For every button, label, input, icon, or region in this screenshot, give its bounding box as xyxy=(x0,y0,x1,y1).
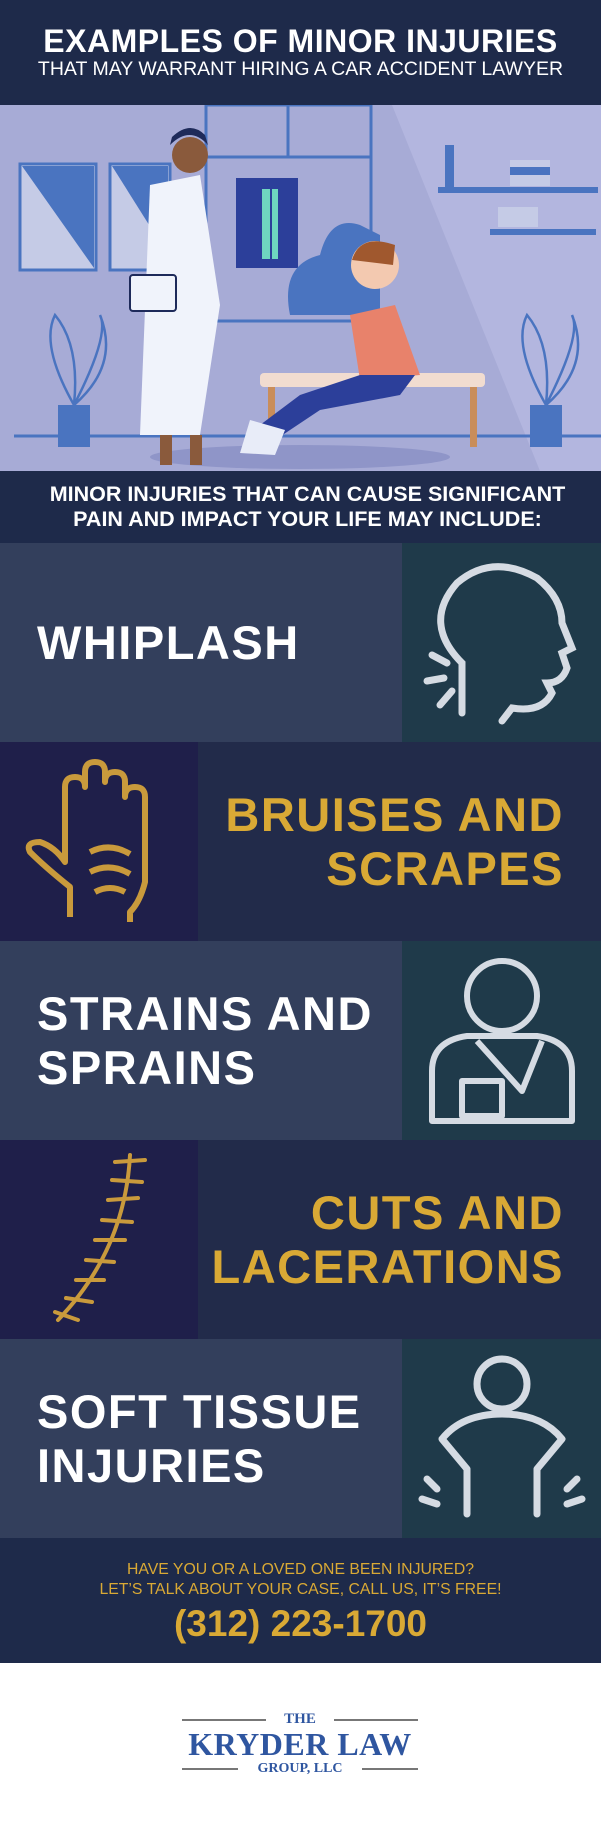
heading: soft tissue injuries: INJURIES xyxy=(37,1438,266,1492)
row: soft tissue injuries xyxy=(0,1339,601,1538)
illustration: doctor and patient xyxy=(0,105,601,471)
phone number: (312) 223-1700 xyxy=(174,1603,427,1644)
cta text: LET’S TALK ABOUT YOUR CASE, CALL US, IT’S FREE! xyxy=(99,1581,502,1598)
heading: bruises and scrapes xyxy=(225,788,564,894)
row: bruises and scrapes xyxy=(0,742,601,941)
logo xyxy=(182,1711,418,1776)
heading: whiplash: WHIPLASH xyxy=(37,616,300,668)
header xyxy=(0,0,601,105)
heading: soft tissue injuries xyxy=(37,1384,362,1492)
heading: soft tissue injuries: SOFT TISSUE xyxy=(37,1384,362,1438)
icon: stitches xyxy=(52,1153,147,1322)
heading: cuts and lacerations: LACERATIONS xyxy=(212,1240,564,1292)
call to action xyxy=(0,1538,601,1663)
cta text xyxy=(99,1561,502,1598)
heading: strains and sprains: SPRAINS xyxy=(37,1040,256,1094)
heading: bruises and scrapes: BRUISES AND xyxy=(225,788,564,840)
icon: arm sling xyxy=(429,958,575,1124)
title: EXAMPLES OF MINOR INJURIES xyxy=(43,23,558,59)
intro band: PAIN AND IMPACT YOUR LIFE MAY INCLUDE: xyxy=(73,507,542,531)
heading: cuts and lacerations xyxy=(212,1186,564,1292)
logo: THE xyxy=(284,1711,316,1727)
heading: cuts and lacerations: CUTS AND xyxy=(311,1186,564,1238)
row: whiplash xyxy=(0,543,601,742)
row: cuts and lacerations xyxy=(0,1140,601,1339)
intro band xyxy=(0,471,601,543)
row: strains and sprains xyxy=(0,941,601,1140)
intro band: MINOR INJURIES THAT CAN CAUSE SIGNIFICANT xyxy=(50,482,565,506)
icon: body pain xyxy=(418,1356,586,1518)
cta text: HAVE YOU OR A LOVED ONE BEEN INJURED? xyxy=(127,1561,474,1578)
subtitle: THAT MAY WARRANT HIRING A CAR ACCIDENT LAWYER xyxy=(38,58,563,80)
icon: head profile xyxy=(424,563,576,724)
icon: hand xyxy=(26,759,148,922)
logo: KRYDER LAW xyxy=(188,1726,412,1762)
heading: strains and sprains xyxy=(37,986,373,1094)
heading: strains and sprains: STRAINS AND xyxy=(37,986,373,1040)
heading: bruises and scrapes: SCRAPES xyxy=(326,842,564,894)
logo: GROUP, LLC xyxy=(257,1761,343,1776)
